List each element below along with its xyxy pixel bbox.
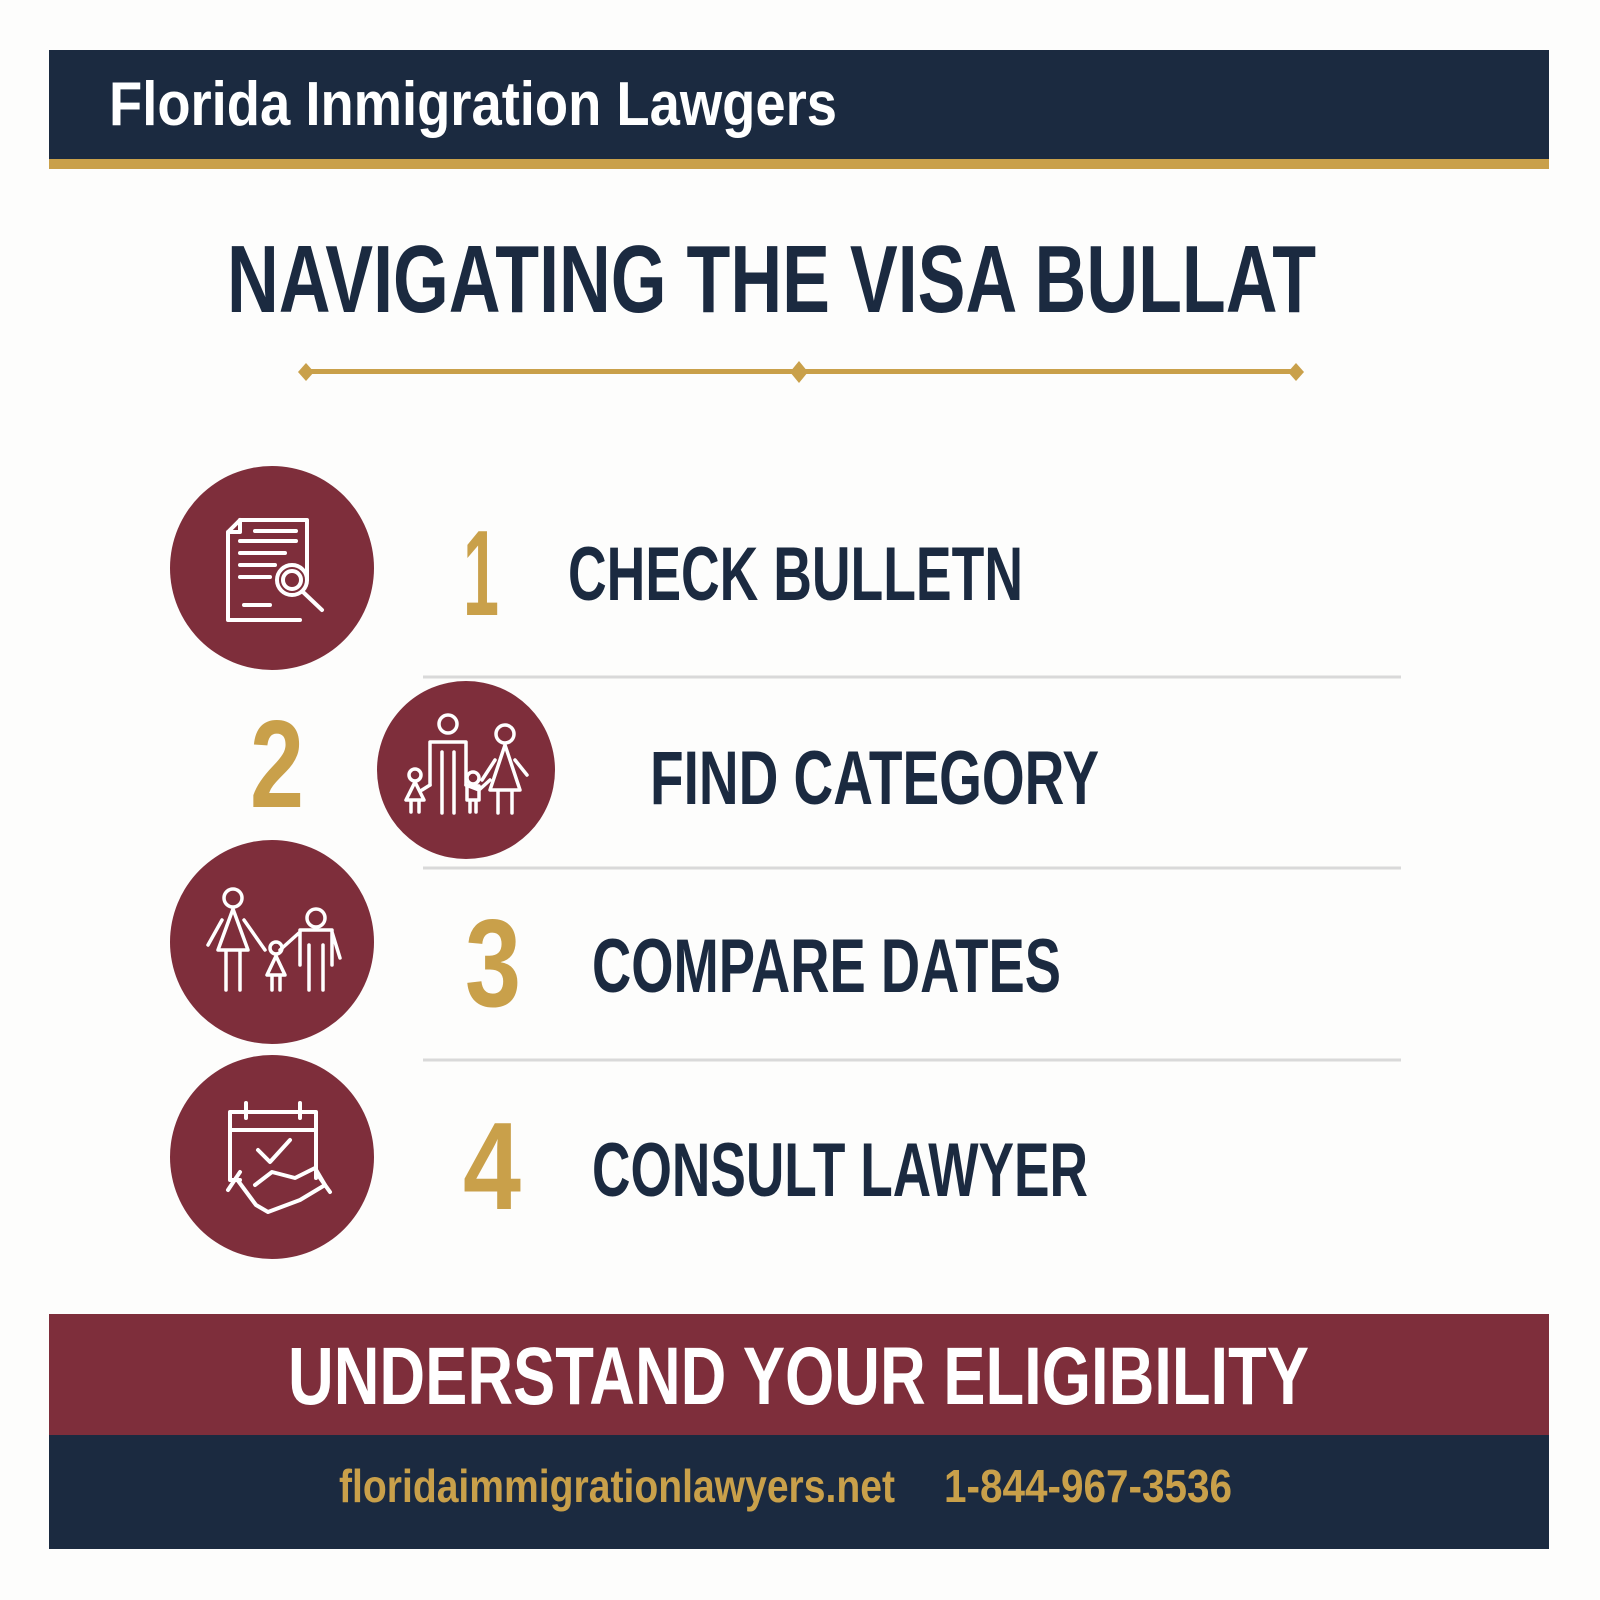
number 4: 4 <box>463 1098 521 1236</box>
decorative diamond divider <box>298 361 1304 383</box>
number 3: 3 <box>465 895 521 1033</box>
label: find category: FIND CATEGORY <box>650 736 1099 821</box>
step 2 <box>250 681 1099 859</box>
label: consult lawyer: CONSULT LAWYER <box>592 1128 1088 1213</box>
phone: 1-844-967-3536 <box>944 1460 1232 1512</box>
footer banner: eligibility: UNDERSTAND YOUR ELIGIBILITY <box>288 1331 1309 1422</box>
header bar <box>49 50 1549 169</box>
step 1 <box>170 466 1023 670</box>
website: floridaimmigrationlawyers.net <box>339 1460 895 1512</box>
label: compare dates: COMPARE DATES <box>592 924 1061 1009</box>
label: check bulletn: CHECK BULLETN <box>568 532 1023 617</box>
number 2: 2 <box>250 696 304 834</box>
icon: calendar and handshake <box>170 1055 374 1259</box>
step 4 <box>170 1055 1088 1259</box>
icon: parents with child <box>170 840 374 1044</box>
header text: Florida Inmigration Lawgers <box>109 70 837 139</box>
number 1: 1 <box>463 505 499 641</box>
icon: document with magnifier <box>170 466 374 670</box>
step 3 <box>170 840 1061 1044</box>
footer contact bar <box>49 1435 1549 1549</box>
icon: family <box>377 681 555 859</box>
footer banner: eligibility <box>49 1314 1549 1436</box>
